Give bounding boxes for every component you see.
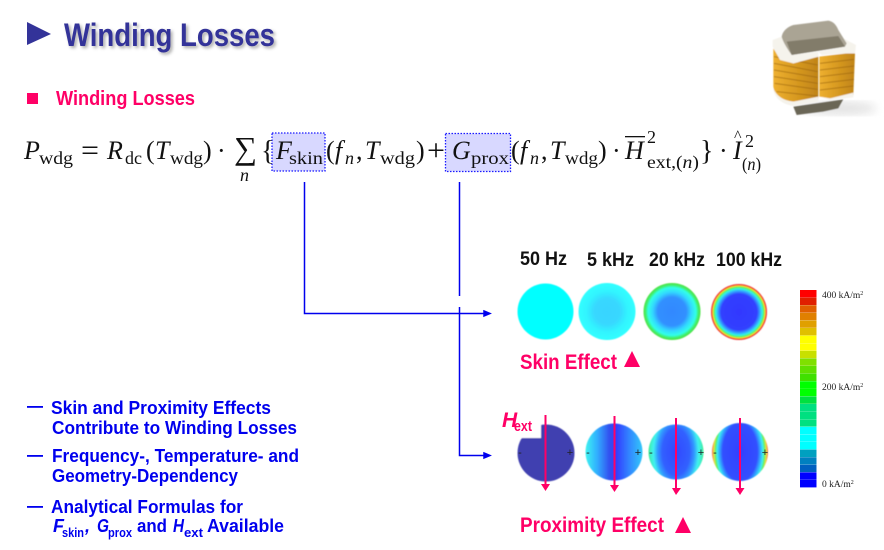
formula terms: (n) bbox=[742, 154, 761, 175]
plus and minus signs: - bbox=[713, 447, 717, 459]
bullet 3: Analytical Formulas for bbox=[51, 497, 243, 517]
formula terms: prox bbox=[471, 148, 509, 168]
formula terms bbox=[23, 127, 761, 185]
colour scale legend: 0 kA/m bbox=[822, 480, 851, 490]
bullet 2 bbox=[27, 446, 299, 486]
formula terms: R bbox=[106, 136, 123, 165]
H_ext label bbox=[502, 409, 532, 435]
plus and minus signs: + bbox=[567, 447, 573, 459]
colour scale legend: 2 bbox=[851, 480, 854, 486]
formula terms: P bbox=[23, 136, 40, 165]
bullet 2: Geometry-Dependency bbox=[52, 466, 238, 486]
plus and minus signs: - bbox=[518, 447, 522, 459]
highlight: G_prox box bbox=[446, 134, 510, 172]
formula terms: + bbox=[427, 134, 445, 167]
bullet 3: G bbox=[97, 516, 109, 536]
colour scale legend: 400 kA/m bbox=[822, 291, 860, 301]
arrow: skin factor to skin effect bbox=[304, 182, 490, 316]
plus and minus signs bbox=[518, 447, 768, 459]
proximity effect label: Proximity Effect bbox=[520, 514, 664, 537]
formula terms: dc bbox=[125, 148, 142, 168]
colour scale legend bbox=[800, 290, 863, 490]
frequency labels: 5 kHz bbox=[587, 250, 634, 271]
frequency labels: 50 Hz bbox=[520, 249, 567, 270]
bullet 3: F bbox=[53, 516, 65, 536]
formula terms: ( bbox=[146, 136, 155, 165]
formula terms: f bbox=[335, 136, 346, 165]
frequency labels bbox=[520, 249, 782, 271]
colour scale legend: 2 bbox=[860, 383, 863, 389]
formula terms: ) bbox=[598, 136, 607, 165]
bullet 1: Skin and Proximity Effects bbox=[51, 398, 271, 418]
formula terms: ) bbox=[416, 136, 425, 165]
formula terms: = bbox=[81, 134, 99, 167]
formula terms: ^ bbox=[734, 128, 742, 145]
formula terms: , bbox=[541, 136, 548, 165]
formula terms: skin bbox=[289, 148, 323, 168]
formula terms: ( bbox=[511, 136, 520, 165]
skin effect label: Skin Effect bbox=[520, 351, 617, 374]
icon: transformer photo bbox=[773, 21, 877, 115]
bullet 2: Frequency-, Temperature- and bbox=[52, 446, 299, 466]
formula terms: ext,(n) bbox=[647, 152, 699, 173]
skin effect circles bbox=[518, 283, 767, 340]
formula terms: T bbox=[550, 136, 566, 165]
proximity effect circles bbox=[505, 420, 768, 482]
formula terms: I bbox=[732, 136, 743, 165]
H_ext label: H bbox=[502, 409, 518, 432]
bullet 3: and bbox=[137, 516, 167, 536]
formula terms: 2 bbox=[647, 127, 656, 147]
formula terms: wdg bbox=[39, 148, 73, 168]
subheading: Winding Losses bbox=[56, 88, 195, 110]
colour scale legend: 200 kA/m bbox=[822, 383, 860, 393]
formula bbox=[23, 127, 761, 185]
plus and minus signs: - bbox=[586, 447, 590, 459]
bullet square bbox=[27, 93, 38, 104]
formula terms: } bbox=[700, 136, 713, 167]
bullet 3 bbox=[27, 497, 284, 540]
plus and minus signs: - bbox=[649, 447, 653, 459]
formula terms: n bbox=[240, 165, 249, 185]
plus and minus signs: + bbox=[635, 447, 641, 459]
bullet 3: prox bbox=[108, 525, 133, 540]
title: Winding Losses bbox=[64, 17, 275, 53]
formula terms: , bbox=[356, 136, 362, 165]
bullet 3: H bbox=[173, 516, 185, 536]
formula terms: wdg bbox=[565, 148, 598, 168]
H_ext label: ext bbox=[514, 418, 532, 435]
plus and minus signs: + bbox=[698, 447, 704, 459]
formula terms: · bbox=[612, 136, 621, 165]
frequency labels: 20 kHz bbox=[649, 250, 705, 271]
bullet 3: ext bbox=[184, 525, 204, 540]
formula terms: wdg bbox=[380, 148, 415, 168]
plus and minus signs: + bbox=[762, 447, 768, 459]
colour scale legend: 2 bbox=[860, 291, 863, 297]
arrow: proximity factor to proximity effect bbox=[460, 182, 490, 458]
formula terms: n bbox=[530, 148, 539, 168]
formula terms: ∑ bbox=[234, 130, 257, 166]
formula terms: wdg bbox=[170, 148, 203, 168]
formula terms: ( bbox=[326, 136, 335, 165]
formula terms: G bbox=[452, 136, 471, 165]
bullet 3: skin bbox=[62, 525, 84, 540]
formula terms: F bbox=[275, 136, 293, 165]
bullet 1: Contribute to Winding Losses bbox=[52, 418, 297, 438]
formula terms: 2 bbox=[745, 131, 754, 151]
bullet 3: , bbox=[84, 516, 90, 536]
frequency labels: 100 kHz bbox=[716, 250, 782, 271]
formula terms: ) bbox=[203, 136, 212, 165]
formula terms: n bbox=[345, 148, 354, 168]
formula terms: { bbox=[261, 136, 274, 167]
bullet 3: Available bbox=[207, 516, 284, 536]
formula terms: · bbox=[217, 136, 226, 165]
highlight: F_skin box bbox=[272, 133, 325, 171]
field arrows bbox=[541, 415, 744, 495]
formula terms: · bbox=[719, 136, 728, 165]
formula terms: f bbox=[520, 136, 531, 165]
title arrow icon bbox=[27, 22, 51, 45]
formula terms: T bbox=[365, 136, 381, 165]
formula terms: H bbox=[624, 136, 645, 165]
bullet 1 bbox=[27, 398, 297, 438]
formula terms: T bbox=[155, 136, 171, 165]
bullet list bbox=[27, 398, 299, 540]
